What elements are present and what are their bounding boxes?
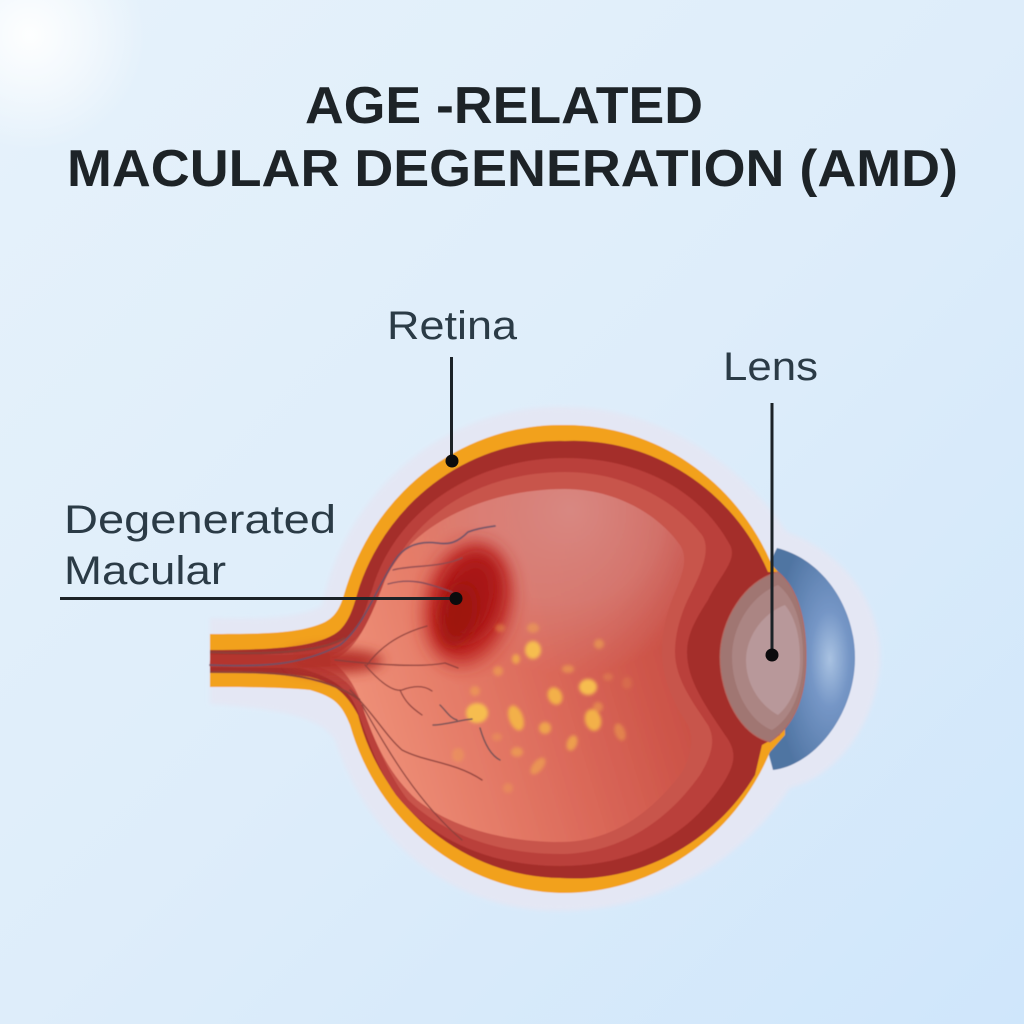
blood vessels (210, 526, 500, 840)
label: Retina (387, 304, 518, 468)
label: Degenerated Macular: Degenerated (64, 498, 336, 542)
choroid: dark red layer (210, 441, 780, 879)
label: Degenerated Macular: Macular (64, 549, 226, 593)
upper retina shading (437, 488, 684, 656)
eye diagram (210, 407, 880, 911)
title: MACULAR DEGENERATION (AMD) (67, 140, 958, 198)
label: Lens: Lens (723, 345, 818, 389)
halo around eye (210, 407, 880, 911)
crystalline lens (720, 572, 806, 742)
lighter red layer (300, 472, 712, 854)
label: Lens (723, 345, 818, 662)
inner retina surface (330, 489, 691, 842)
label: Retina: Retina (387, 304, 518, 348)
cornea (765, 548, 855, 770)
title (67, 77, 958, 198)
optic nerve strands (210, 638, 383, 700)
title: AGE -RELATED (305, 77, 703, 135)
middle red layer (210, 458, 733, 866)
label: Degenerated Macular (60, 498, 462, 605)
sclera: orange outer layer with optic nerve (210, 425, 785, 893)
drusen deposits (452, 623, 632, 793)
degenerated macula lesion (412, 534, 524, 674)
